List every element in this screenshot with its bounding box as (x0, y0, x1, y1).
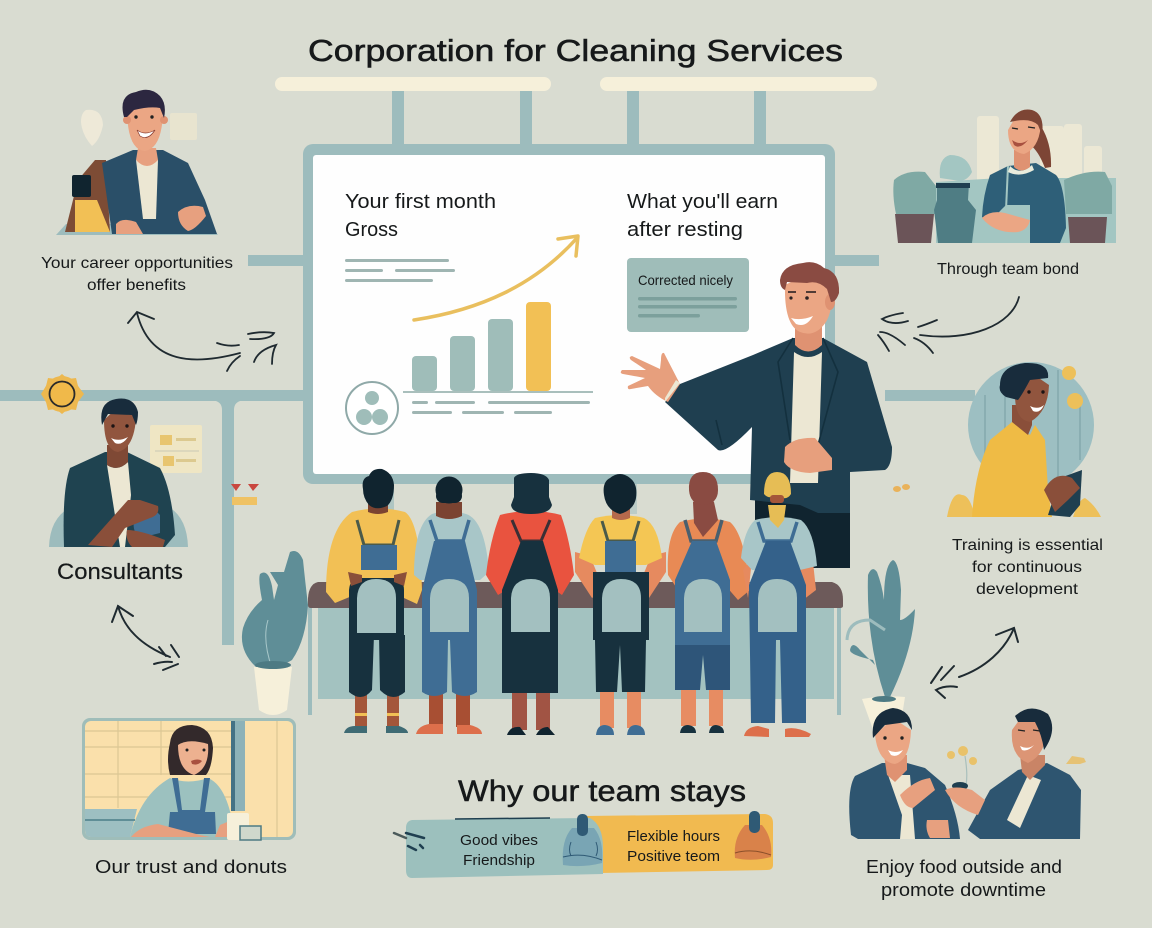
worker 2 (414, 476, 489, 734)
hair (1010, 110, 1043, 135)
label: training: for continuous (972, 559, 1082, 576)
label: enjoy food (866, 857, 1062, 900)
label: training: Training is essential (952, 537, 1103, 554)
face (785, 270, 833, 334)
worker 3 (486, 473, 574, 735)
shoes (344, 726, 367, 733)
right man: hair (1015, 708, 1052, 750)
face (127, 97, 163, 151)
shorts (595, 640, 646, 692)
trousers (755, 478, 850, 568)
plant: left (242, 551, 308, 715)
presenter (621, 262, 892, 568)
arrow: training (931, 628, 1018, 698)
right man: jacket (968, 763, 1081, 839)
portrait: consultants (49, 399, 202, 547)
right shrub and pot (1064, 172, 1112, 214)
shorts (675, 645, 730, 690)
collar (1008, 165, 1034, 175)
red top (486, 511, 574, 595)
neck (1012, 405, 1032, 435)
arms (88, 500, 158, 547)
left man: jacket (849, 763, 960, 839)
pocket (511, 579, 550, 632)
hair (436, 476, 462, 504)
bottle (134, 505, 160, 538)
arch (49, 505, 188, 547)
shirt (790, 352, 822, 483)
board heading: earnings (627, 191, 778, 241)
pocket (357, 579, 396, 633)
icon: hearts and token (231, 484, 259, 505)
window grid (85, 721, 277, 837)
straps (602, 521, 639, 541)
jacket (102, 150, 217, 234)
bee (1066, 756, 1086, 764)
label: team bond: Through team bond (937, 261, 1079, 278)
face (1015, 372, 1049, 422)
yellow panel (585, 814, 773, 873)
top (982, 163, 1066, 243)
raised hand (621, 353, 680, 402)
card: corrected nicely: Corrected nicely (638, 272, 733, 288)
teal panel (406, 818, 603, 878)
center plant and bucket (940, 155, 972, 181)
label: trust and donuts: Our trust and donuts (95, 857, 287, 877)
cream note (150, 425, 202, 473)
label: training: development (976, 581, 1079, 598)
cuff (665, 380, 680, 402)
arrow: to career (128, 312, 276, 371)
portrait: training (947, 362, 1101, 517)
braid (693, 498, 718, 537)
backing (936, 178, 1116, 243)
hair (764, 472, 791, 498)
torso (130, 778, 232, 837)
legs (681, 686, 696, 726)
icon: sun badge (41, 374, 84, 414)
straps (758, 522, 797, 541)
arms (131, 820, 232, 837)
straps (512, 520, 550, 541)
board heading: earnings: What you'll earn (627, 191, 778, 213)
neck (107, 445, 128, 468)
worker 4 (575, 474, 666, 735)
icon: small leaves (893, 484, 910, 492)
apron (980, 205, 1030, 243)
right man: shirt (1007, 775, 1041, 828)
icon: blue bag (563, 828, 602, 866)
pocket (684, 579, 722, 632)
placeholder text lines (345, 259, 455, 282)
plants (947, 494, 1101, 517)
neck (436, 502, 462, 519)
left man: neck (884, 755, 907, 782)
card: corrected nicely (627, 258, 749, 332)
right man: face (1012, 712, 1048, 763)
trousers (349, 635, 405, 697)
portrait: enjoy food (849, 708, 1086, 839)
left man: face (875, 718, 911, 764)
arrow: team bond (878, 297, 1019, 353)
overalls (749, 541, 806, 723)
yellow text: Flexible hours (627, 828, 720, 845)
pocket (430, 579, 469, 632)
shirt (741, 517, 817, 570)
face (104, 405, 136, 452)
hair (511, 473, 552, 514)
left shrub and pot (893, 172, 936, 214)
shirt (579, 515, 662, 565)
shirt (136, 160, 158, 219)
banner: why our team stays: Friendship (463, 852, 535, 869)
top banner bars (275, 77, 877, 91)
face (178, 741, 208, 775)
apron (593, 572, 649, 640)
cream leaf (81, 110, 103, 146)
legs (512, 690, 527, 730)
pocket (758, 579, 797, 632)
banner: why our team stays: Positive teom (627, 848, 720, 865)
hair (101, 399, 138, 425)
worker 1 (326, 469, 422, 733)
bib straps (357, 520, 399, 545)
straps (430, 520, 469, 541)
icon: orange bag (735, 825, 771, 860)
chart caption lines (412, 401, 590, 414)
board heading: earnings: after resting (627, 219, 743, 241)
arrow: consultants (112, 606, 179, 670)
seedling flowers (947, 746, 977, 765)
base (56, 224, 218, 235)
cup (227, 813, 249, 840)
shirt (972, 422, 1052, 517)
phone and hand (1048, 470, 1082, 517)
teal text: Good vibes (460, 832, 538, 849)
neck (612, 505, 630, 520)
forearms (798, 558, 816, 600)
plant: right (847, 560, 915, 735)
label: training (952, 537, 1103, 598)
worker 6 (741, 472, 817, 737)
heading: why our team stays: Why our team stays (458, 775, 746, 808)
hands (982, 212, 1030, 232)
ear (825, 294, 835, 310)
hands (348, 572, 407, 586)
eyes and mouth (788, 291, 816, 293)
forearms (575, 552, 604, 598)
hair (168, 725, 213, 775)
emoji dots (1062, 366, 1076, 380)
label: enjoy food: Enjoy food outside and (866, 857, 1062, 877)
board heading: first month (345, 191, 496, 241)
sweater (326, 508, 422, 604)
label: enjoy food: promote downtime (881, 880, 1046, 900)
service counter (308, 582, 843, 715)
label: career opportunities: offer benefits (87, 277, 186, 294)
shirt (414, 511, 489, 580)
label: career opportunities: Your career opportunities (41, 255, 233, 272)
hair (363, 469, 394, 508)
dashes (394, 833, 424, 850)
growth arrow (414, 236, 578, 320)
icon: team circle (346, 382, 398, 434)
left man: hair (873, 708, 912, 738)
shoes (596, 725, 614, 735)
arms (116, 220, 143, 234)
column (231, 721, 245, 811)
bar chart (403, 302, 593, 393)
ankles (429, 690, 443, 727)
ponytail (768, 505, 786, 528)
orange top (668, 518, 750, 600)
overalls (422, 541, 477, 696)
connector pipes (0, 90, 975, 645)
neck (795, 325, 822, 352)
label: career opportunities (41, 255, 233, 294)
hair (1000, 363, 1048, 400)
circle backdrop (968, 362, 1094, 488)
skyline (977, 116, 1102, 196)
board heading: first month: Your first month (345, 191, 496, 213)
portrait: career opportunities (56, 90, 218, 235)
face (1008, 116, 1041, 154)
jacket lapels (716, 338, 838, 445)
left man: shirt (888, 775, 915, 839)
jacket (665, 338, 892, 513)
seated colleague (65, 160, 110, 232)
legs (600, 690, 614, 728)
shoes (416, 724, 443, 734)
pocket (602, 579, 641, 632)
hair (604, 474, 636, 514)
overalls (675, 541, 730, 647)
hand on stomach (784, 438, 832, 473)
neck (368, 503, 388, 514)
presentation board (303, 144, 835, 484)
shoes (680, 725, 696, 733)
banner: why our team stays (394, 811, 773, 878)
right man: neck (1020, 755, 1045, 780)
jacket (64, 452, 175, 547)
hair (122, 90, 165, 118)
left man: hands (900, 778, 950, 838)
overall bib (172, 778, 210, 812)
right man: hand (945, 788, 985, 815)
straps (685, 520, 722, 541)
worker 5 (668, 472, 750, 733)
title: Corporation for Cleaning Services (308, 33, 843, 68)
hair (780, 262, 839, 302)
portrait: team bond (893, 110, 1116, 243)
cream note (170, 113, 197, 140)
neck (1014, 150, 1030, 170)
ankles (355, 694, 367, 728)
shoes (507, 727, 526, 735)
shirt (107, 462, 131, 547)
apron skirt (502, 541, 558, 693)
hair (689, 472, 718, 505)
shoes (744, 726, 769, 737)
counter band (85, 809, 137, 837)
ponytail (1030, 118, 1051, 168)
apron (349, 578, 404, 640)
board heading: first month: Gross (345, 219, 398, 241)
label: consultants: Consultants (57, 559, 183, 584)
portrait: trust and donuts (82, 718, 296, 840)
